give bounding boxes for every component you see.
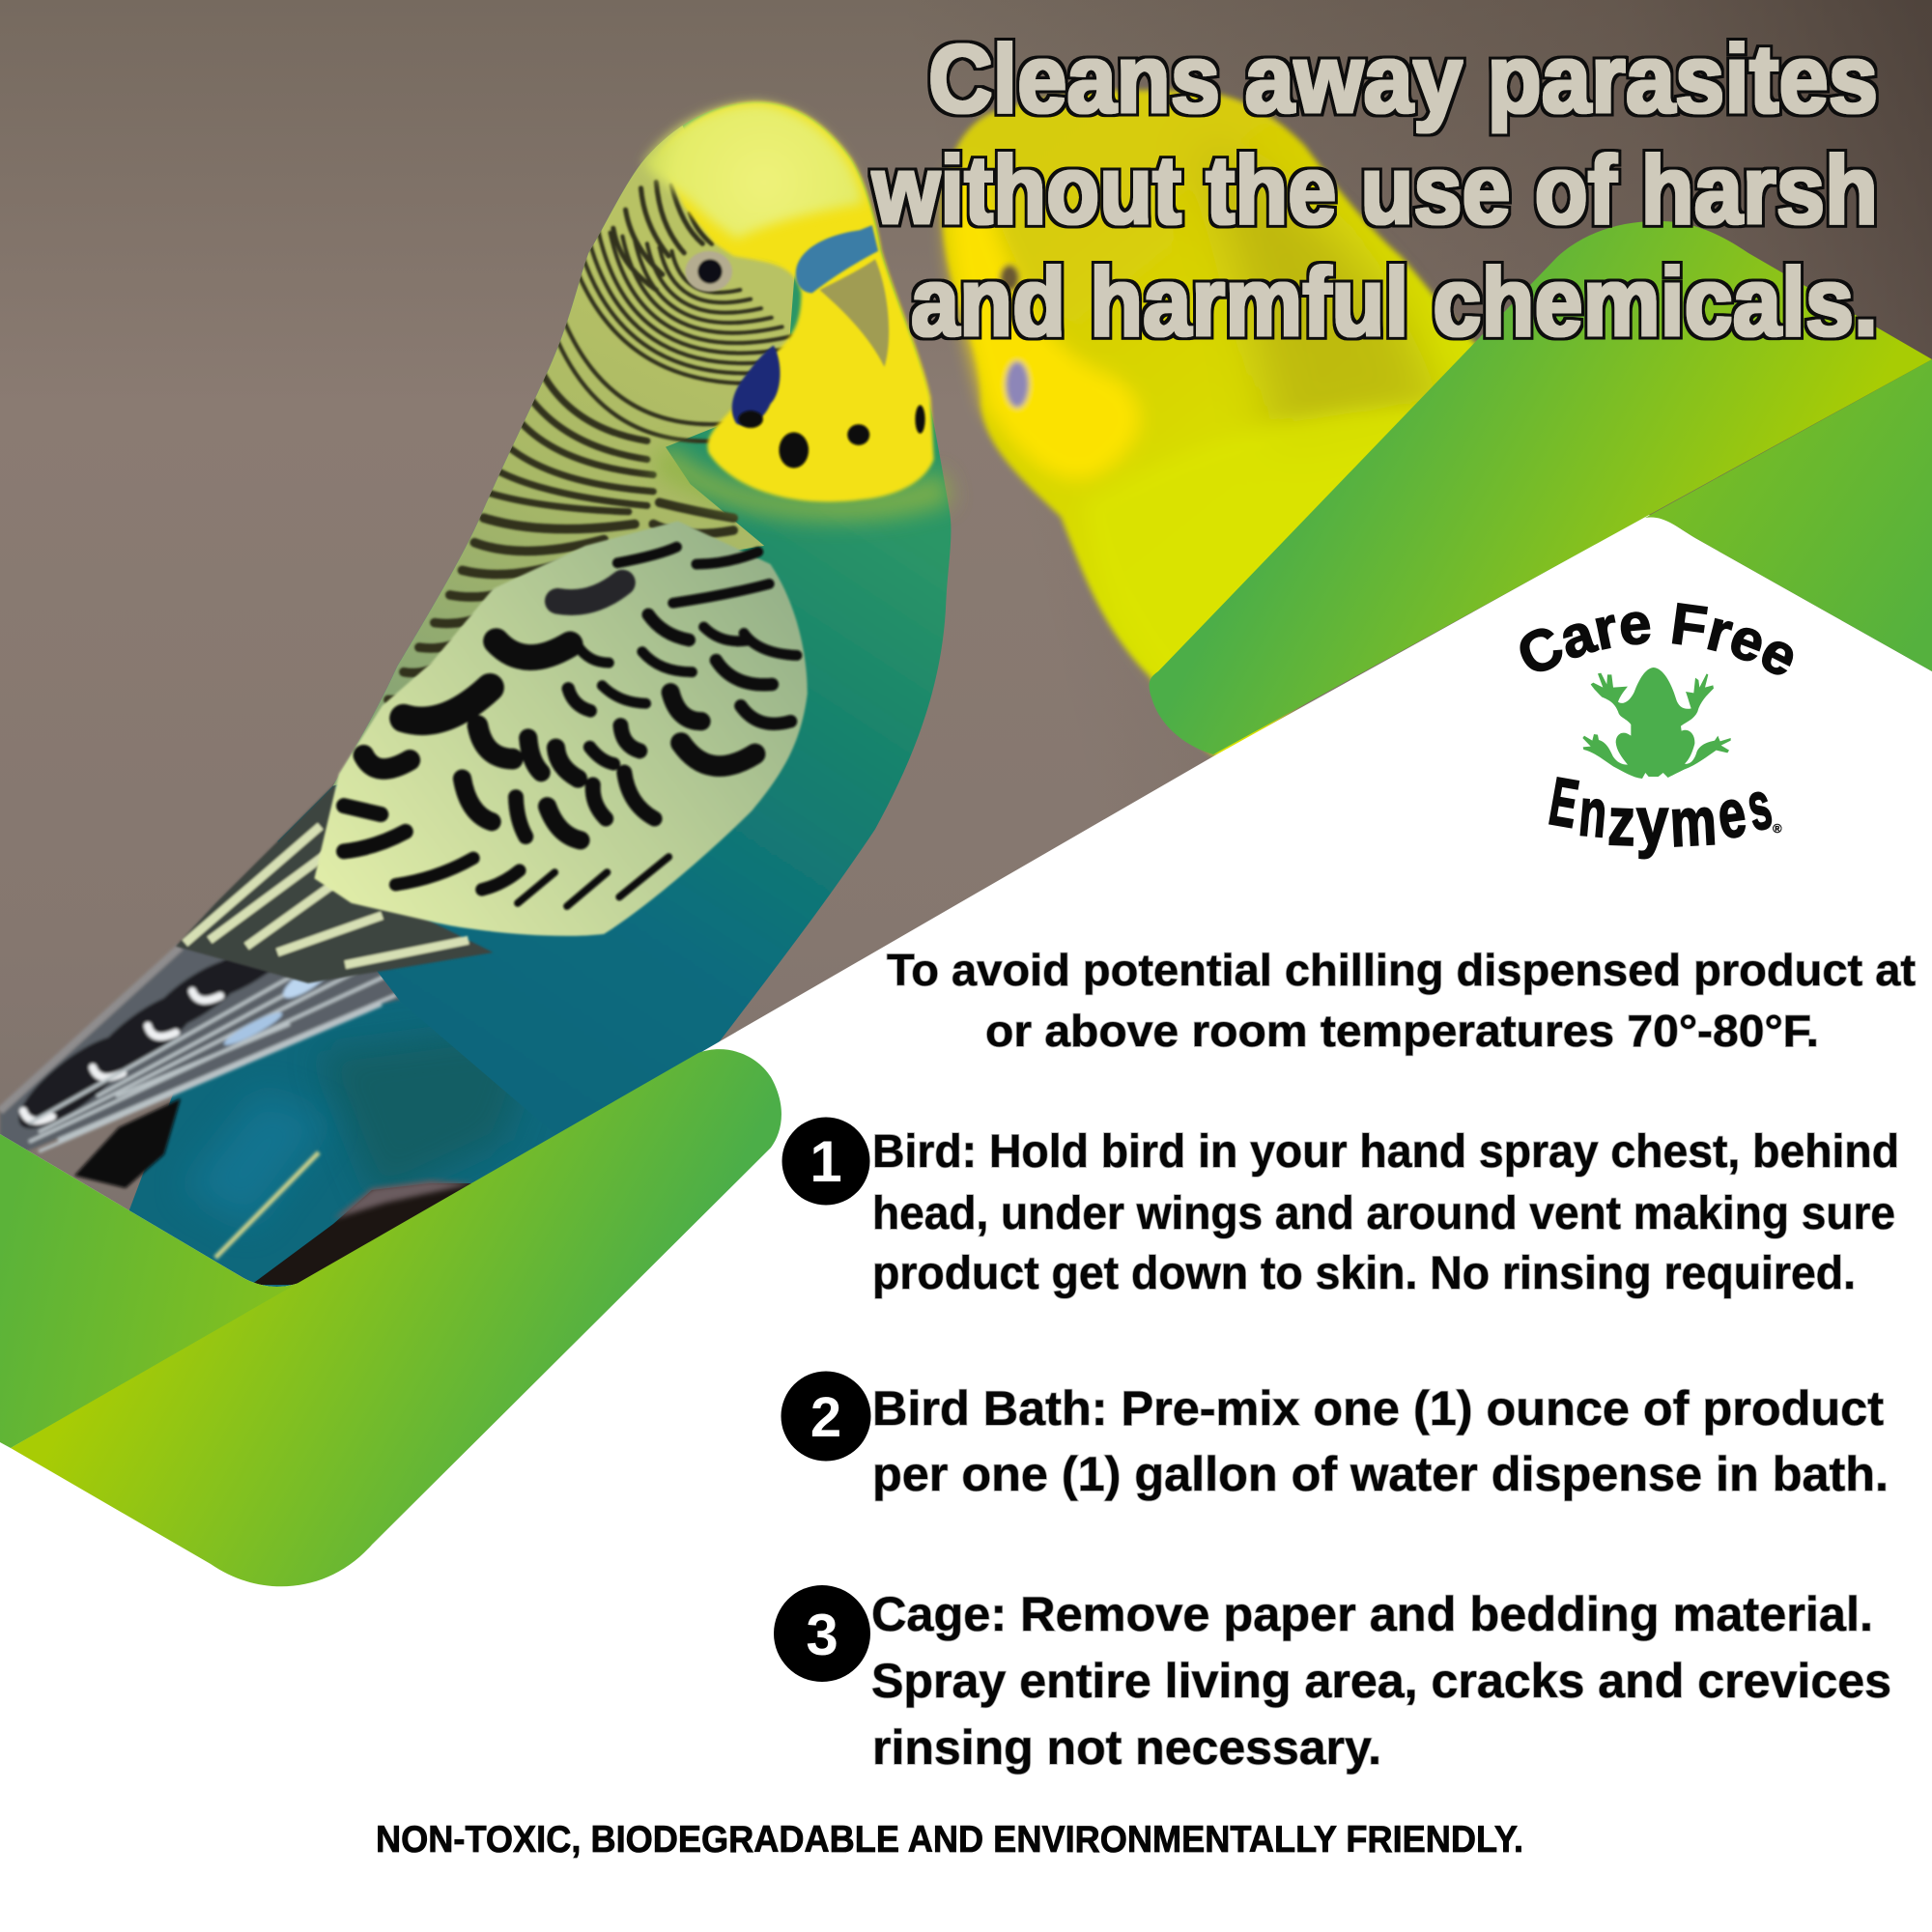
nape stripes (388, 182, 835, 700)
number badge 2 (781, 1372, 871, 1461)
number badge 2: 2 (810, 1386, 841, 1449)
front band (11, 1049, 781, 1586)
step 2 text: Bird Bath: Pre-mix one (1) ounce of product (872, 1381, 1884, 1435)
number badge 3: 3 (806, 1603, 838, 1667)
photo background (0, 0, 1932, 1352)
logo word Enzymes: e (1713, 775, 1750, 853)
step 1 text: Bird: Hold bird in your hand spray chest, behind (872, 1126, 1899, 1178)
forehead (644, 103, 863, 239)
cere (796, 225, 878, 293)
photo: lower body of green budgerigar (74, 995, 734, 1304)
step 3 text: rinsing not necessary. (872, 1720, 1381, 1775)
number badge 1: 1 (810, 1129, 842, 1194)
intro text: To avoid potential chilling dispensed product at (887, 945, 1916, 995)
throat spots (738, 405, 925, 468)
logo word Enzymes: y (1636, 782, 1668, 859)
logo word Enzymes: n (1577, 774, 1610, 852)
beak (820, 259, 889, 367)
green chevron upper right (1150, 221, 1932, 754)
wing (314, 521, 808, 936)
number badge 3 (774, 1585, 870, 1682)
intro text (887, 945, 1916, 1056)
icon: frog (1582, 668, 1731, 779)
photo: yellow budgerigar behind (942, 91, 1546, 763)
face (660, 102, 934, 501)
wing scallops (344, 547, 797, 906)
step 1 text: head, under wings and around vent making sure (872, 1188, 1895, 1239)
step 2 text (872, 1381, 1889, 1501)
intro text: or above room temperatures 70°-80°F. (985, 1006, 1819, 1056)
step 2 (781, 1372, 1889, 1501)
lower neck glow (653, 440, 952, 521)
headline: Cleans away parasites (928, 25, 1878, 133)
footer statement: NON-TOXIC, BIODEGRADABLE AND ENVIRONMENTALLY FRIENDLY. (376, 1819, 1523, 1861)
logo word Enzymes: m (1668, 783, 1719, 862)
bird silhouette (277, 102, 951, 1105)
back band (0, 1134, 333, 1448)
step 3 text: Cage: Remove paper and bedding material. (871, 1587, 1873, 1641)
logo: Care Free Enzymes (1520, 603, 1793, 862)
logo word Enzymes: s (1741, 767, 1777, 846)
step 3 text: Spray entire living area, cracks and crevices (871, 1654, 1891, 1708)
photo: green budgerigar upper body (176, 77, 986, 1248)
primary coverts (176, 783, 493, 983)
logo word Enzymes: ® (1773, 821, 1782, 836)
step 1 text (872, 1126, 1899, 1299)
headline (871, 25, 1878, 356)
front band (1150, 221, 1932, 754)
green chevron lower left (0, 1049, 781, 1586)
photo: tail feathers (0, 918, 454, 1151)
step 1 text: product get down to skin. No rinsing required. (872, 1248, 1856, 1299)
number badge 1 (782, 1117, 869, 1206)
step 3 text (871, 1587, 1891, 1775)
logo arc text: Care Free (1520, 603, 1793, 675)
logo word Enzymes: E (1544, 764, 1583, 842)
back band (1645, 359, 1932, 671)
white panel (0, 515, 1932, 1932)
step 3 (774, 1585, 1891, 1775)
step 1 (782, 1117, 1899, 1299)
cheek patch (732, 346, 781, 425)
logo word Enzymes (1544, 764, 1782, 862)
nape and back (327, 114, 795, 786)
eye (685, 251, 732, 292)
logo word Enzymes: z (1606, 784, 1636, 860)
step 2 text: per one (1) gallon of water dispense in bath. (872, 1447, 1889, 1501)
